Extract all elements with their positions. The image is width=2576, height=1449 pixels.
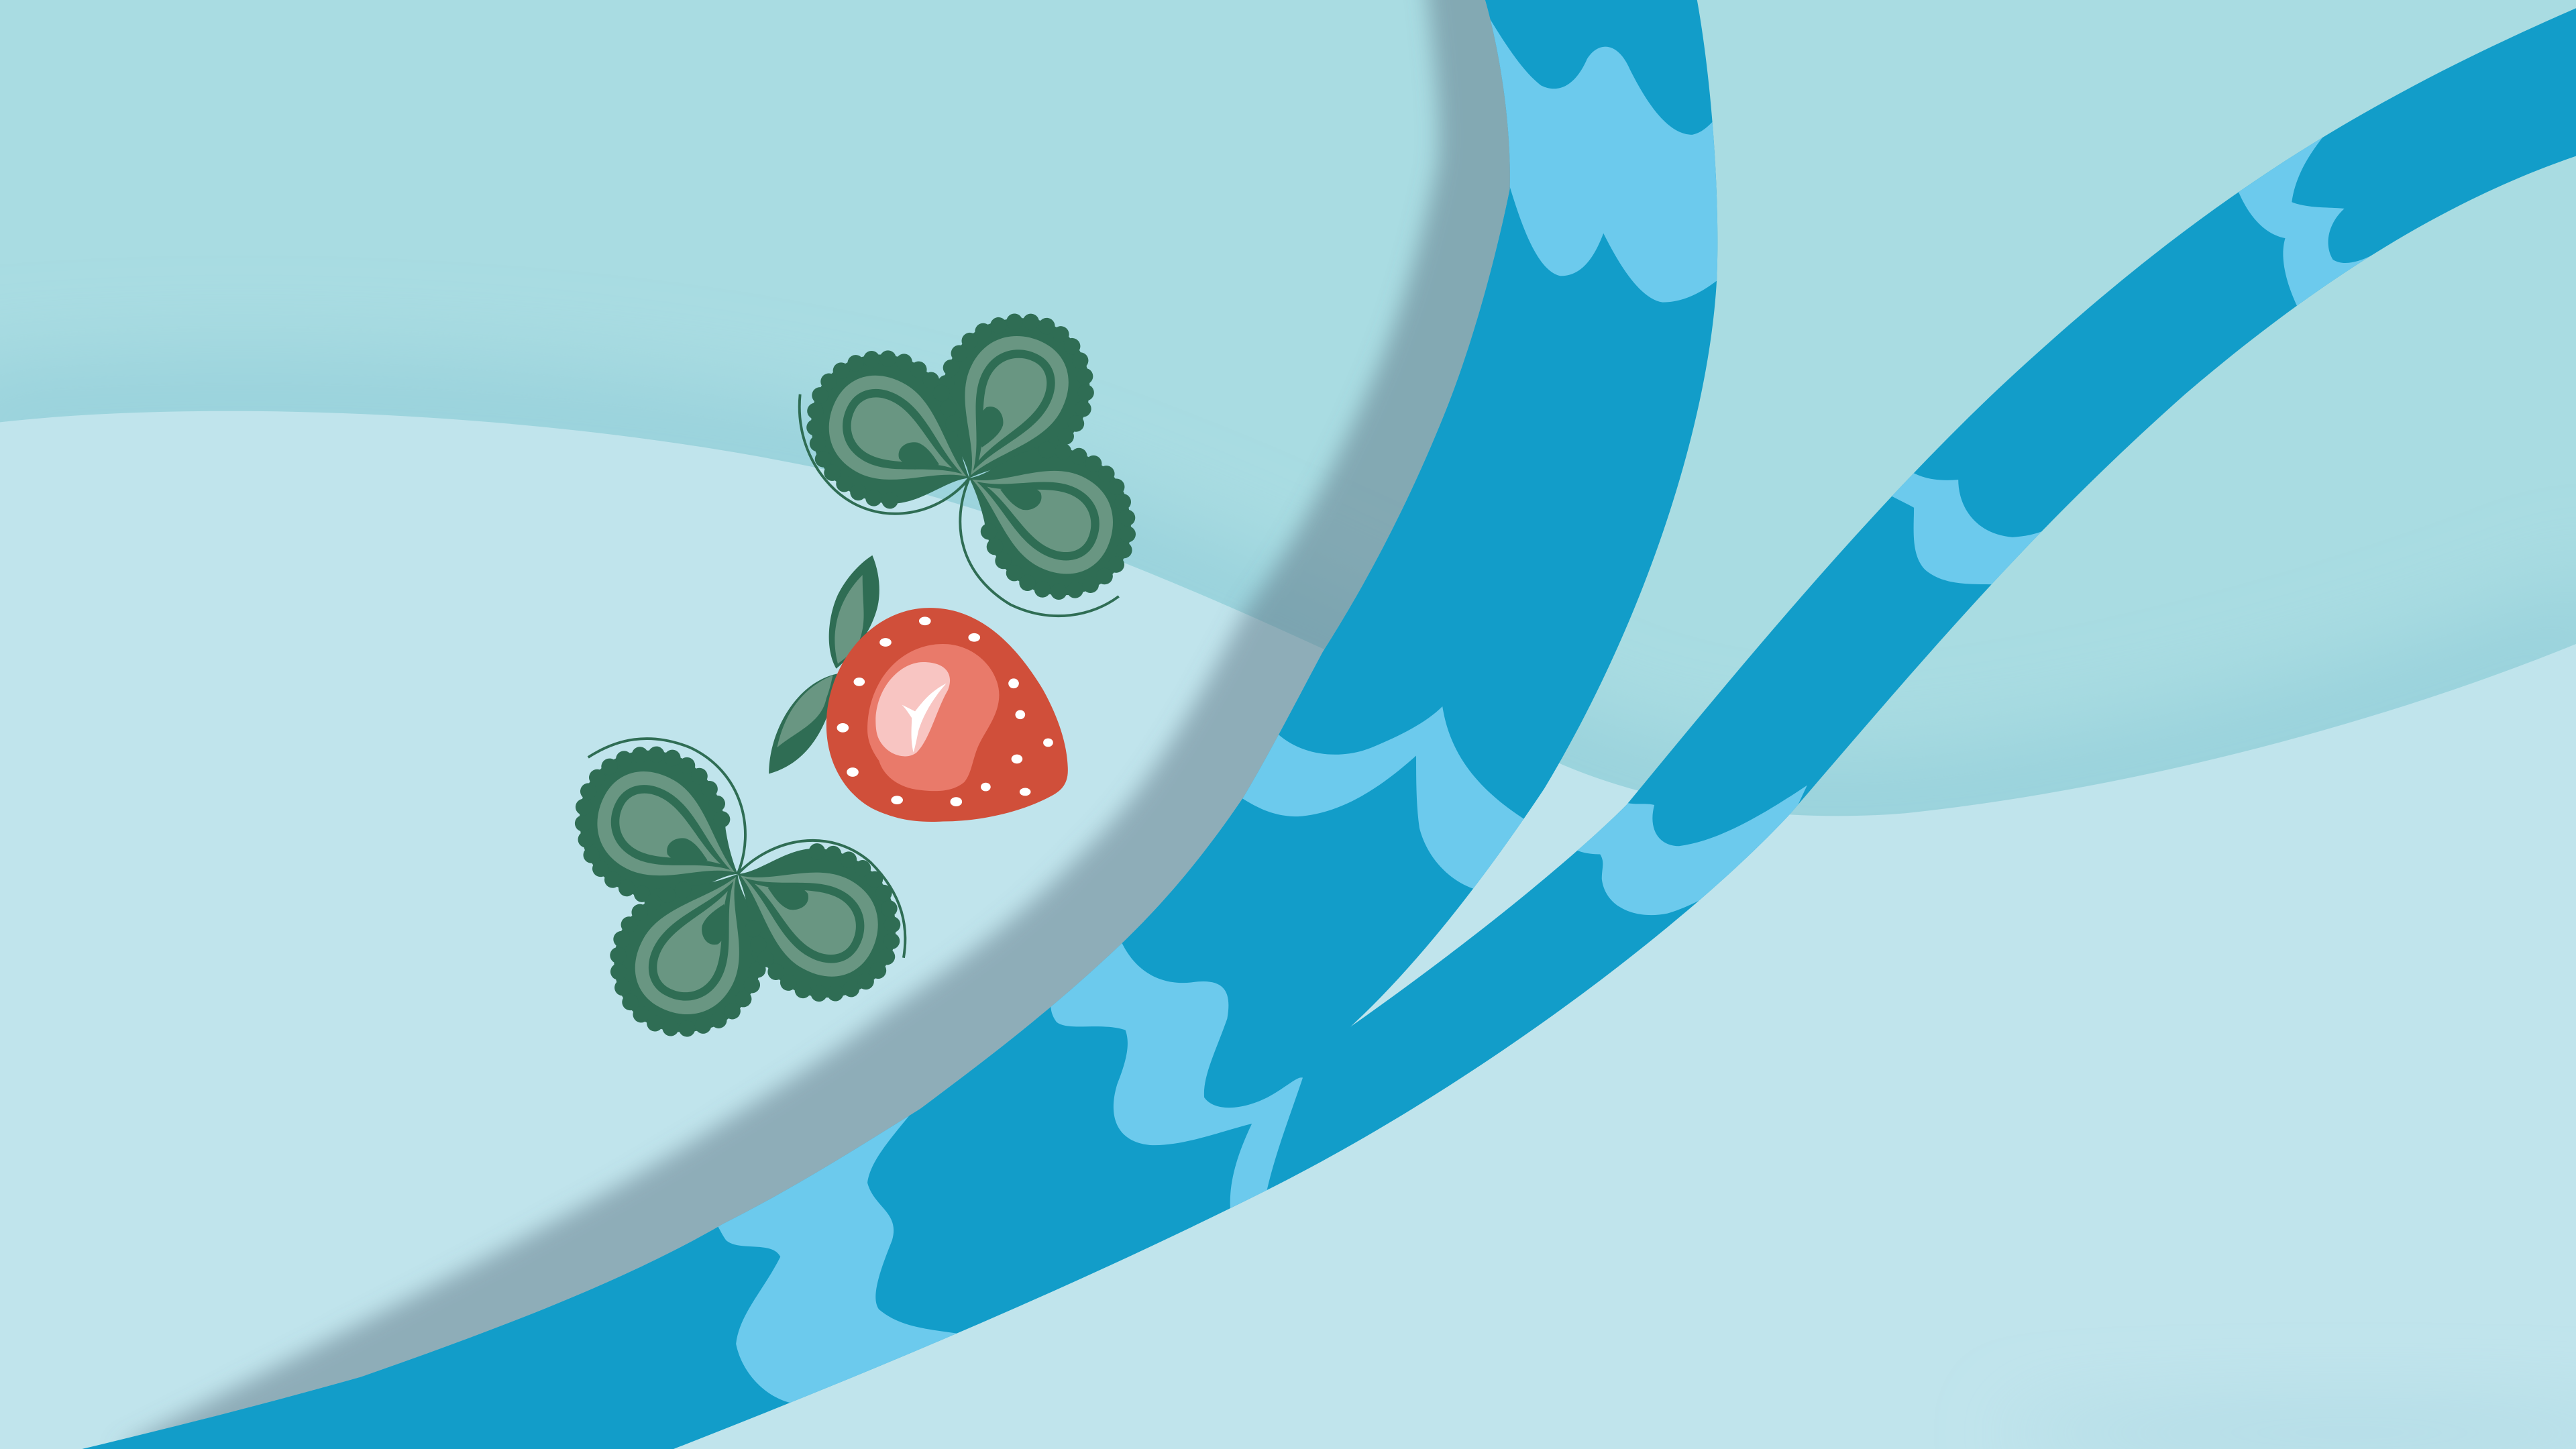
clover stem: lower curl	[960, 478, 1119, 616]
bank shadow band	[115, 0, 1643, 1449]
foam: bottom left band	[718, 1116, 957, 1403]
foam: top of main ribbon	[1491, 19, 1717, 303]
clover leaf: left	[783, 329, 1006, 540]
strawberry body	[826, 608, 1068, 822]
strawberry	[769, 555, 1068, 822]
clover stem: left curl	[800, 394, 969, 514]
clover leaf: right	[702, 812, 924, 1024]
clover: upper	[783, 291, 1157, 619]
clover: lower	[551, 724, 924, 1061]
clover leaf: up right	[906, 291, 1115, 512]
clover leaf: left	[551, 724, 773, 936]
strawberry seeds	[837, 616, 1053, 806]
soft shadow along the bank edge	[0, 414, 2576, 816]
strawberry highlight: outer	[867, 644, 999, 791]
strawberry leaf: left	[769, 674, 838, 773]
foam: second ribbon lower	[1561, 786, 1807, 915]
foam: middle of main ribbon	[1232, 706, 1528, 889]
foam: second ribbon middle	[1892, 473, 2042, 585]
strawberry leaf: top	[829, 555, 879, 669]
clover leaf: down left	[588, 838, 800, 1061]
strawberry sparkle	[902, 684, 947, 753]
clover leaf: right	[938, 414, 1157, 619]
pale lower bank	[0, 411, 2576, 1449]
clover stem: top curl	[588, 739, 745, 874]
foam: lower band with wavy tail	[1051, 940, 1303, 1224]
strawberry highlight: inner	[875, 662, 950, 756]
river foam patches	[706, 0, 2382, 1446]
clover stem: right curl	[738, 841, 905, 958]
foam: second ribbon upper	[2239, 138, 2371, 306]
soft shade at bottom right	[2004, 1416, 2576, 1449]
